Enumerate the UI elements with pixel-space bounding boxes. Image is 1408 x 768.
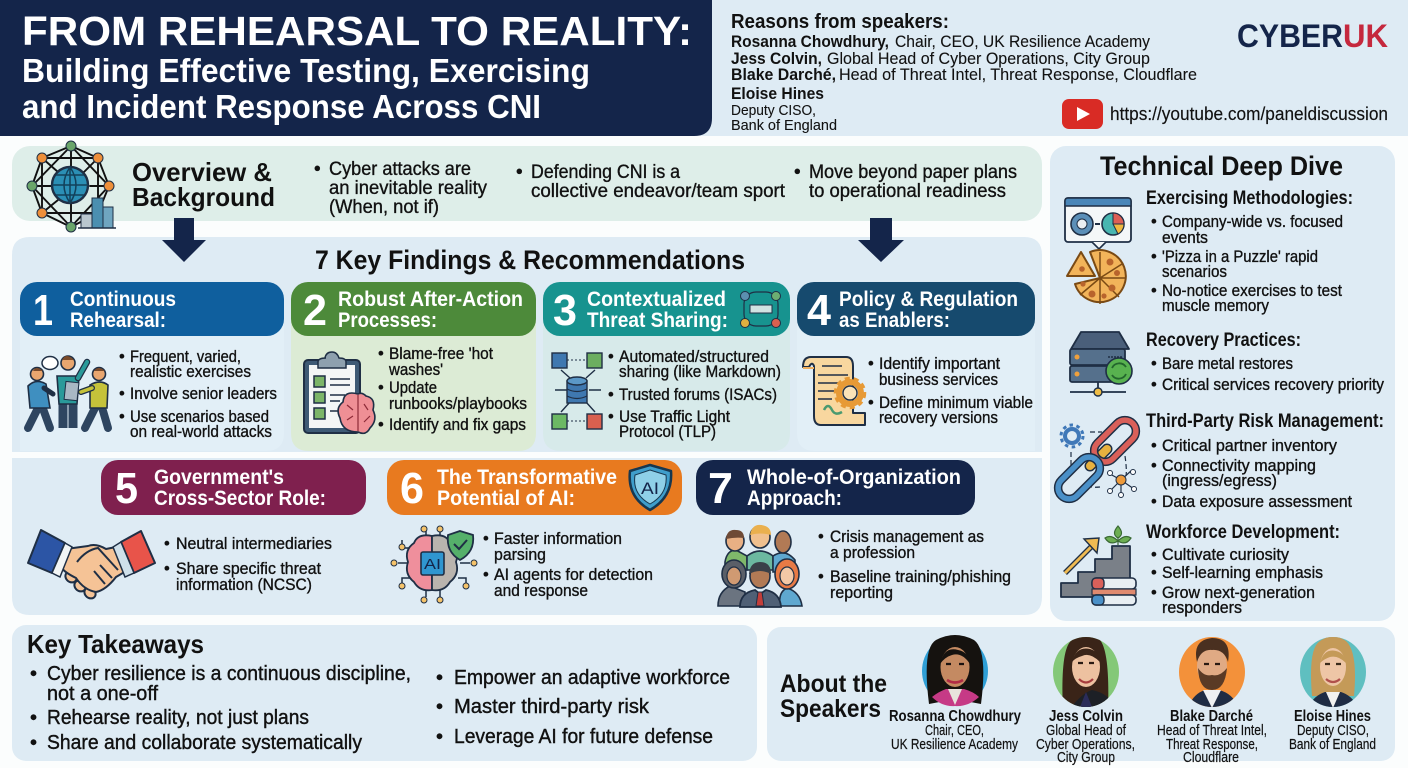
text: card 2 bullets: Blame-free 'hot — [389, 345, 493, 363]
text: workforce development: responders — [1162, 599, 1242, 617]
icon: AI brain: AI — [424, 556, 441, 573]
icon: AI brain — [391, 526, 477, 603]
text: recovery practices — [1146, 330, 1385, 394]
text: card 2 bullets: Update — [389, 379, 437, 397]
speaker: Eloise Hines: Bank of England — [1289, 736, 1376, 753]
text: overview bullet one — [314, 159, 487, 218]
header: title block: FROM REHEARSAL TO REALITY: — [22, 8, 692, 54]
text: card 1 bullets: Use scenarios based — [130, 408, 269, 426]
panel: key findings bottom row — [12, 458, 1042, 615]
text: card 1 bullets: Frequent, varied, — [130, 348, 241, 366]
text: card 2 bullets: runbooks/playbooks — [389, 395, 527, 413]
text: takeaways left column — [30, 663, 411, 754]
icon: AI shield — [630, 465, 671, 510]
text: card 4 bullets: recovery versions — [879, 409, 998, 427]
text: takeaways right column: • — [436, 696, 443, 718]
icon: globe network — [27, 141, 116, 232]
text: card 1 bullets: on real-world attacks — [130, 423, 272, 441]
card 3: contextualized threat sharing: 3 — [553, 286, 577, 335]
text: card 4 bullets: Identify important — [879, 355, 1000, 373]
speaker: Rosanna Chowdhury — [889, 635, 1021, 753]
text: takeaways left column: not a one-off — [47, 683, 158, 705]
text: workforce development: • — [1151, 546, 1157, 564]
header: speaker list: Head of Threat Intel, Threat Response, Cloudflare — [839, 65, 1197, 84]
text: card 3 bullets: • — [608, 408, 614, 426]
card 2: robust after-action processes: Processes: — [338, 309, 437, 332]
speaker: Blake Darché: Cloudflare — [1183, 749, 1239, 766]
header: speaker list: Bank of England — [731, 117, 837, 134]
card 5: government role: 5 — [115, 464, 138, 513]
icon: stairs, arrow, books and plant — [1061, 526, 1136, 605]
text: card 5 bullets: • — [164, 560, 170, 578]
card 1: continuous rehearsal: 1 — [33, 286, 53, 335]
text: overview bullet one: an inevitable reality — [329, 178, 487, 199]
text: card 3 bullets: • — [608, 348, 614, 366]
icon: handshake — [28, 530, 155, 601]
text: card 1 bullets: • — [119, 348, 125, 366]
card 4: policy and regulation: 4 — [807, 286, 832, 335]
icon: browser and pizza — [1065, 198, 1131, 304]
text: card 1 bullets — [119, 348, 277, 441]
text: takeaways right column: Leverage AI for future defense — [454, 726, 713, 748]
arrow: right down — [858, 218, 904, 262]
text: card 4 bullets — [868, 355, 1033, 427]
speaker: Blake Darché: Blake Darché — [1170, 708, 1253, 725]
text: card 2 bullets: • — [378, 345, 384, 363]
text: card 3 bullets: sharing (like Markdown) — [619, 363, 781, 381]
text: overview bullet three: to operational readiness — [809, 181, 1006, 202]
card 2: robust after-action processes — [291, 282, 536, 451]
card 1: continuous rehearsal: Rehearsal: — [70, 309, 166, 332]
card 3: contextualized threat sharing — [543, 282, 790, 451]
speaker: Eloise Hines — [1289, 636, 1376, 753]
heading: technical deep dive: Technical Deep Dive — [1100, 151, 1343, 181]
icon: AI shield: AI — [641, 479, 659, 498]
card 6: potential of AI — [387, 460, 682, 603]
panel: about the speakers — [767, 627, 1395, 766]
speaker: Jess Colvin: City Group — [1057, 749, 1115, 766]
text: exercising methodologies: • — [1151, 248, 1157, 266]
text: third-party risk management: (ingress/egress) — [1162, 472, 1277, 490]
header: title block: and Incident Response Across CNI — [22, 88, 541, 125]
panel: key findings top row — [12, 237, 1042, 452]
heading: key findings: 7 Key Findings & Recommendations — [315, 245, 745, 275]
card 2: robust after-action processes: Robust After-Action — [338, 288, 523, 311]
text: takeaways left column: Share and collaborate systematically — [47, 732, 362, 754]
icon: group of people — [718, 525, 802, 607]
heading: overview — [132, 157, 275, 212]
header: speaker list: Chair, CEO, UK Resilience Academy — [895, 32, 1150, 51]
text: workforce development: • — [1151, 564, 1157, 582]
text: overview bullet three: • — [794, 162, 801, 183]
card 3: contextualized threat sharing: Threat Sharing: — [587, 309, 728, 332]
text: card 7 bullets: reporting — [830, 584, 893, 602]
text: third-party risk management: Data exposure assessment — [1162, 493, 1352, 511]
text: card 7 bullets — [818, 528, 1011, 602]
text: exercising methodologies: scenarios — [1162, 263, 1227, 281]
text: exercising methodologies: No-notice exercises to test — [1162, 282, 1342, 300]
text: exercising methodologies: Company-wide vs. focused — [1162, 213, 1343, 231]
speaker: Blake Darché: Head of Threat Intel, — [1157, 722, 1267, 739]
text: card 3 bullets: Protocol (TLP) — [619, 423, 716, 441]
logo: CYBERUK: CYBER — [1237, 18, 1343, 54]
text: card 2 bullets: • — [378, 379, 384, 397]
text: takeaways left column: • — [30, 732, 37, 754]
text: takeaways left column: Rehearse reality, not just plans — [47, 707, 309, 729]
text: card 3 bullets: Trusted forums (ISACs) — [619, 386, 777, 404]
icon: policy scroll with gear — [803, 357, 865, 425]
header: title block: Building Effective Testing, Exercising — [22, 52, 590, 89]
text: card 6 bullets: and response — [494, 582, 588, 600]
text: takeaways right column: • — [436, 726, 443, 748]
text: recovery practices: • — [1151, 355, 1157, 373]
card 7: whole of organization — [696, 460, 1011, 607]
icon: sharing ring — [740, 292, 780, 328]
text: exercising methodologies: 'Pizza in a Puzzle' rapid — [1162, 248, 1318, 266]
text: exercising methodologies — [1146, 188, 1353, 315]
text: card 6 bullets: AI agents for detection — [494, 566, 653, 584]
text: card 5 bullets: information (NCSC) — [176, 576, 312, 594]
icon: database sharing hub — [552, 353, 602, 429]
text: card 4 bullets: business services — [879, 371, 998, 389]
text: takeaways right column: • — [436, 667, 443, 689]
icon: server recovery — [1070, 332, 1132, 396]
icon: YouTube link: https://youtube.com/paneldiscussion — [1110, 104, 1388, 124]
text: workforce development — [1146, 522, 1340, 617]
text: recovery practices: • — [1151, 376, 1157, 394]
text: card 6 bullets: parsing — [494, 546, 546, 564]
text: takeaways left column: • — [30, 663, 37, 685]
speaker: Blake Darché: Threat Response, — [1166, 736, 1258, 753]
arrow: left down — [162, 218, 206, 262]
card 1: continuous rehearsal: Continuous — [70, 288, 176, 311]
card 6: potential of AI: Potential of AI: — [437, 487, 575, 510]
header: speaker list: Blake Darché, — [731, 65, 836, 84]
text: overview bullet one: • — [314, 159, 321, 180]
text: card 3 bullets: Use Traffic Light — [619, 408, 730, 426]
text: card 2 bullets: Identify and fix gaps — [389, 416, 526, 434]
heading: overview: Overview & — [132, 157, 272, 187]
text: card 6 bullets: • — [483, 530, 489, 548]
speaker: Jess Colvin — [1036, 635, 1135, 766]
header: speaker list: Eloise Hines — [731, 84, 824, 103]
text: card 1 bullets: • — [119, 385, 125, 403]
text: recovery practices: Critical services recovery priority — [1162, 376, 1385, 394]
speaker: Rosanna Chowdhury: UK Resilience Academy — [891, 736, 1018, 753]
text: card 7 bullets: Baseline training/phishing — [830, 568, 1011, 586]
header: title block — [0, 0, 712, 136]
text: workforce development: • — [1151, 584, 1157, 602]
text: third-party risk management: • — [1151, 437, 1157, 455]
text: card 2 bullets: washes' — [388, 361, 443, 379]
card 4: policy and regulation: as Enablers: — [839, 309, 950, 332]
text: card 6 bullets: Faster information — [494, 530, 622, 548]
text: card 4 bullets: Define minimum viable — [879, 394, 1033, 412]
panel: key takeaways — [12, 625, 757, 761]
speaker: Jess Colvin: Jess Colvin — [1049, 708, 1123, 725]
text: card 2 bullets — [378, 345, 527, 434]
text: overview bullet two: • — [516, 162, 523, 183]
text: card 3 bullets: Automated/structured — [619, 348, 769, 366]
card 4: policy and regulation: Policy & Regulation — [839, 288, 1018, 311]
text: card 5 bullets: • — [164, 535, 170, 553]
heading: key takeaways: Key Takeaways — [27, 629, 204, 659]
header: right speakers band — [700, 0, 1408, 136]
card 7: whole of organization: Approach: — [747, 487, 842, 510]
speaker: Eloise Hines: Eloise Hines — [1294, 708, 1371, 725]
text: exercising methodologies: Exercising Methodologies: — [1146, 188, 1353, 209]
text: card 1 bullets: Involve senior leaders — [130, 385, 277, 403]
speaker: Jess Colvin: Cyber Operations, — [1036, 736, 1135, 753]
text: recovery practices: Recovery Practices: — [1146, 330, 1301, 351]
text: card 7 bullets: a profession — [830, 544, 915, 562]
icon: team collaborating — [28, 356, 108, 428]
text: third-party risk management: • — [1151, 493, 1157, 511]
text: overview bullet two: collective endeavor/team sport — [531, 181, 786, 202]
text: card 1 bullets: • — [119, 408, 125, 426]
header: speaker list — [731, 11, 1197, 134]
card 7: whole of organization: 7 — [708, 464, 733, 513]
text: card 4 bullets: • — [868, 355, 874, 373]
card 2: robust after-action processes: 2 — [303, 286, 327, 335]
panel: technical deep dive — [1050, 146, 1395, 621]
text: workforce development: Cultivate curiosity — [1162, 546, 1290, 564]
text: overview bullet two — [516, 162, 786, 202]
speaker: Blake Darché — [1157, 637, 1267, 766]
text: card 3 bullets — [608, 348, 781, 441]
text: card 1 bullets: realistic exercises — [130, 363, 251, 381]
text: overview bullet two: Defending CNI is a — [531, 162, 680, 183]
logo: CYBERUK: UK — [1343, 18, 1388, 54]
text: card 5 bullets: Neutral intermediaries — [176, 535, 332, 553]
header: speaker list: Global Head of Cyber Operations, City Group — [827, 49, 1150, 68]
speaker: Rosanna Chowdhury: Chair, CEO, — [925, 722, 984, 739]
text: card 7 bullets: • — [818, 568, 824, 586]
text: takeaways left column: • — [30, 707, 37, 729]
speaker: Rosanna Chowdhury: Rosanna Chowdhury — [889, 708, 1021, 725]
text: takeaways right column: Master third-party risk — [454, 696, 650, 718]
text: third-party risk management: Critical partner inventory — [1162, 437, 1338, 455]
text: third-party risk management — [1146, 411, 1384, 511]
card 1: continuous rehearsal — [20, 282, 284, 451]
card 4: policy and regulation — [797, 282, 1035, 451]
text: card 7 bullets: Crisis management as — [830, 528, 984, 546]
card 5: government role — [28, 460, 366, 601]
heading: overview: Background — [132, 182, 275, 212]
text: recovery practices: Bare metal restores — [1162, 355, 1293, 373]
text: overview bullet one: (When, not if) — [329, 197, 439, 218]
text: exercising methodologies: events — [1162, 229, 1208, 247]
card 5: government role: Cross-Sector Role: — [154, 487, 326, 510]
card 5: government role: Government's — [154, 466, 284, 489]
header: speaker list: Deputy CISO, — [731, 102, 816, 119]
text: exercising methodologies: • — [1151, 282, 1157, 300]
panel: overview and background — [12, 141, 1042, 232]
header: speaker list: Reasons from speakers: — [731, 11, 949, 33]
text: takeaways right column: Empower an adaptive workforce — [454, 667, 730, 689]
text: card 3 bullets: • — [608, 386, 614, 404]
text: card 6 bullets — [483, 530, 653, 600]
text: card 5 bullets — [164, 535, 332, 594]
text: takeaways right column — [436, 667, 730, 748]
text: third-party risk management: • — [1151, 457, 1157, 475]
heading: about the speakers: Speakers — [780, 695, 881, 723]
card 6: potential of AI: The Transformative — [437, 466, 617, 489]
card 6: potential of AI: 6 — [400, 464, 424, 513]
text: workforce development: Workforce Development: — [1146, 522, 1340, 543]
header: speaker list: Jess Colvin, — [731, 49, 822, 68]
heading: about the speakers — [780, 670, 887, 723]
text: overview bullet one: Cyber attacks are — [329, 159, 471, 180]
text: workforce development: Grow next-generation — [1162, 584, 1315, 602]
header: speaker list: Rosanna Chowdhury, — [731, 32, 889, 51]
icon: chain link with gear and nodes — [1054, 416, 1140, 503]
text: overview bullet three: Move beyond paper plans — [809, 162, 1017, 183]
text: card 6 bullets: • — [483, 566, 489, 584]
card 7: whole of organization: Whole-of-Organization — [747, 466, 961, 489]
card 3: contextualized threat sharing: Contextualized — [587, 288, 726, 311]
text: card 2 bullets: • — [378, 416, 384, 434]
text: card 5 bullets: Share specific threat — [176, 560, 321, 578]
text: exercising methodologies: • — [1151, 213, 1157, 231]
speaker: Eloise Hines: Deputy CISO, — [1297, 722, 1369, 739]
heading: about the speakers: About the — [780, 670, 887, 698]
text: takeaways left column: Cyber resilience is a continuous discipline, — [47, 663, 411, 685]
text: overview bullet three — [794, 162, 1017, 202]
text: workforce development: Self-learning emphasis — [1162, 564, 1323, 582]
text: card 7 bullets: • — [818, 528, 824, 546]
text: card 4 bullets: • — [868, 394, 874, 412]
speaker: Jess Colvin: Global Head of — [1046, 722, 1127, 739]
text: exercising methodologies: muscle memory — [1162, 297, 1270, 315]
icon: YouTube link — [1062, 99, 1388, 129]
text: third-party risk management: Connectivity mapping — [1162, 457, 1316, 475]
icon: checklist with brain — [304, 352, 375, 433]
